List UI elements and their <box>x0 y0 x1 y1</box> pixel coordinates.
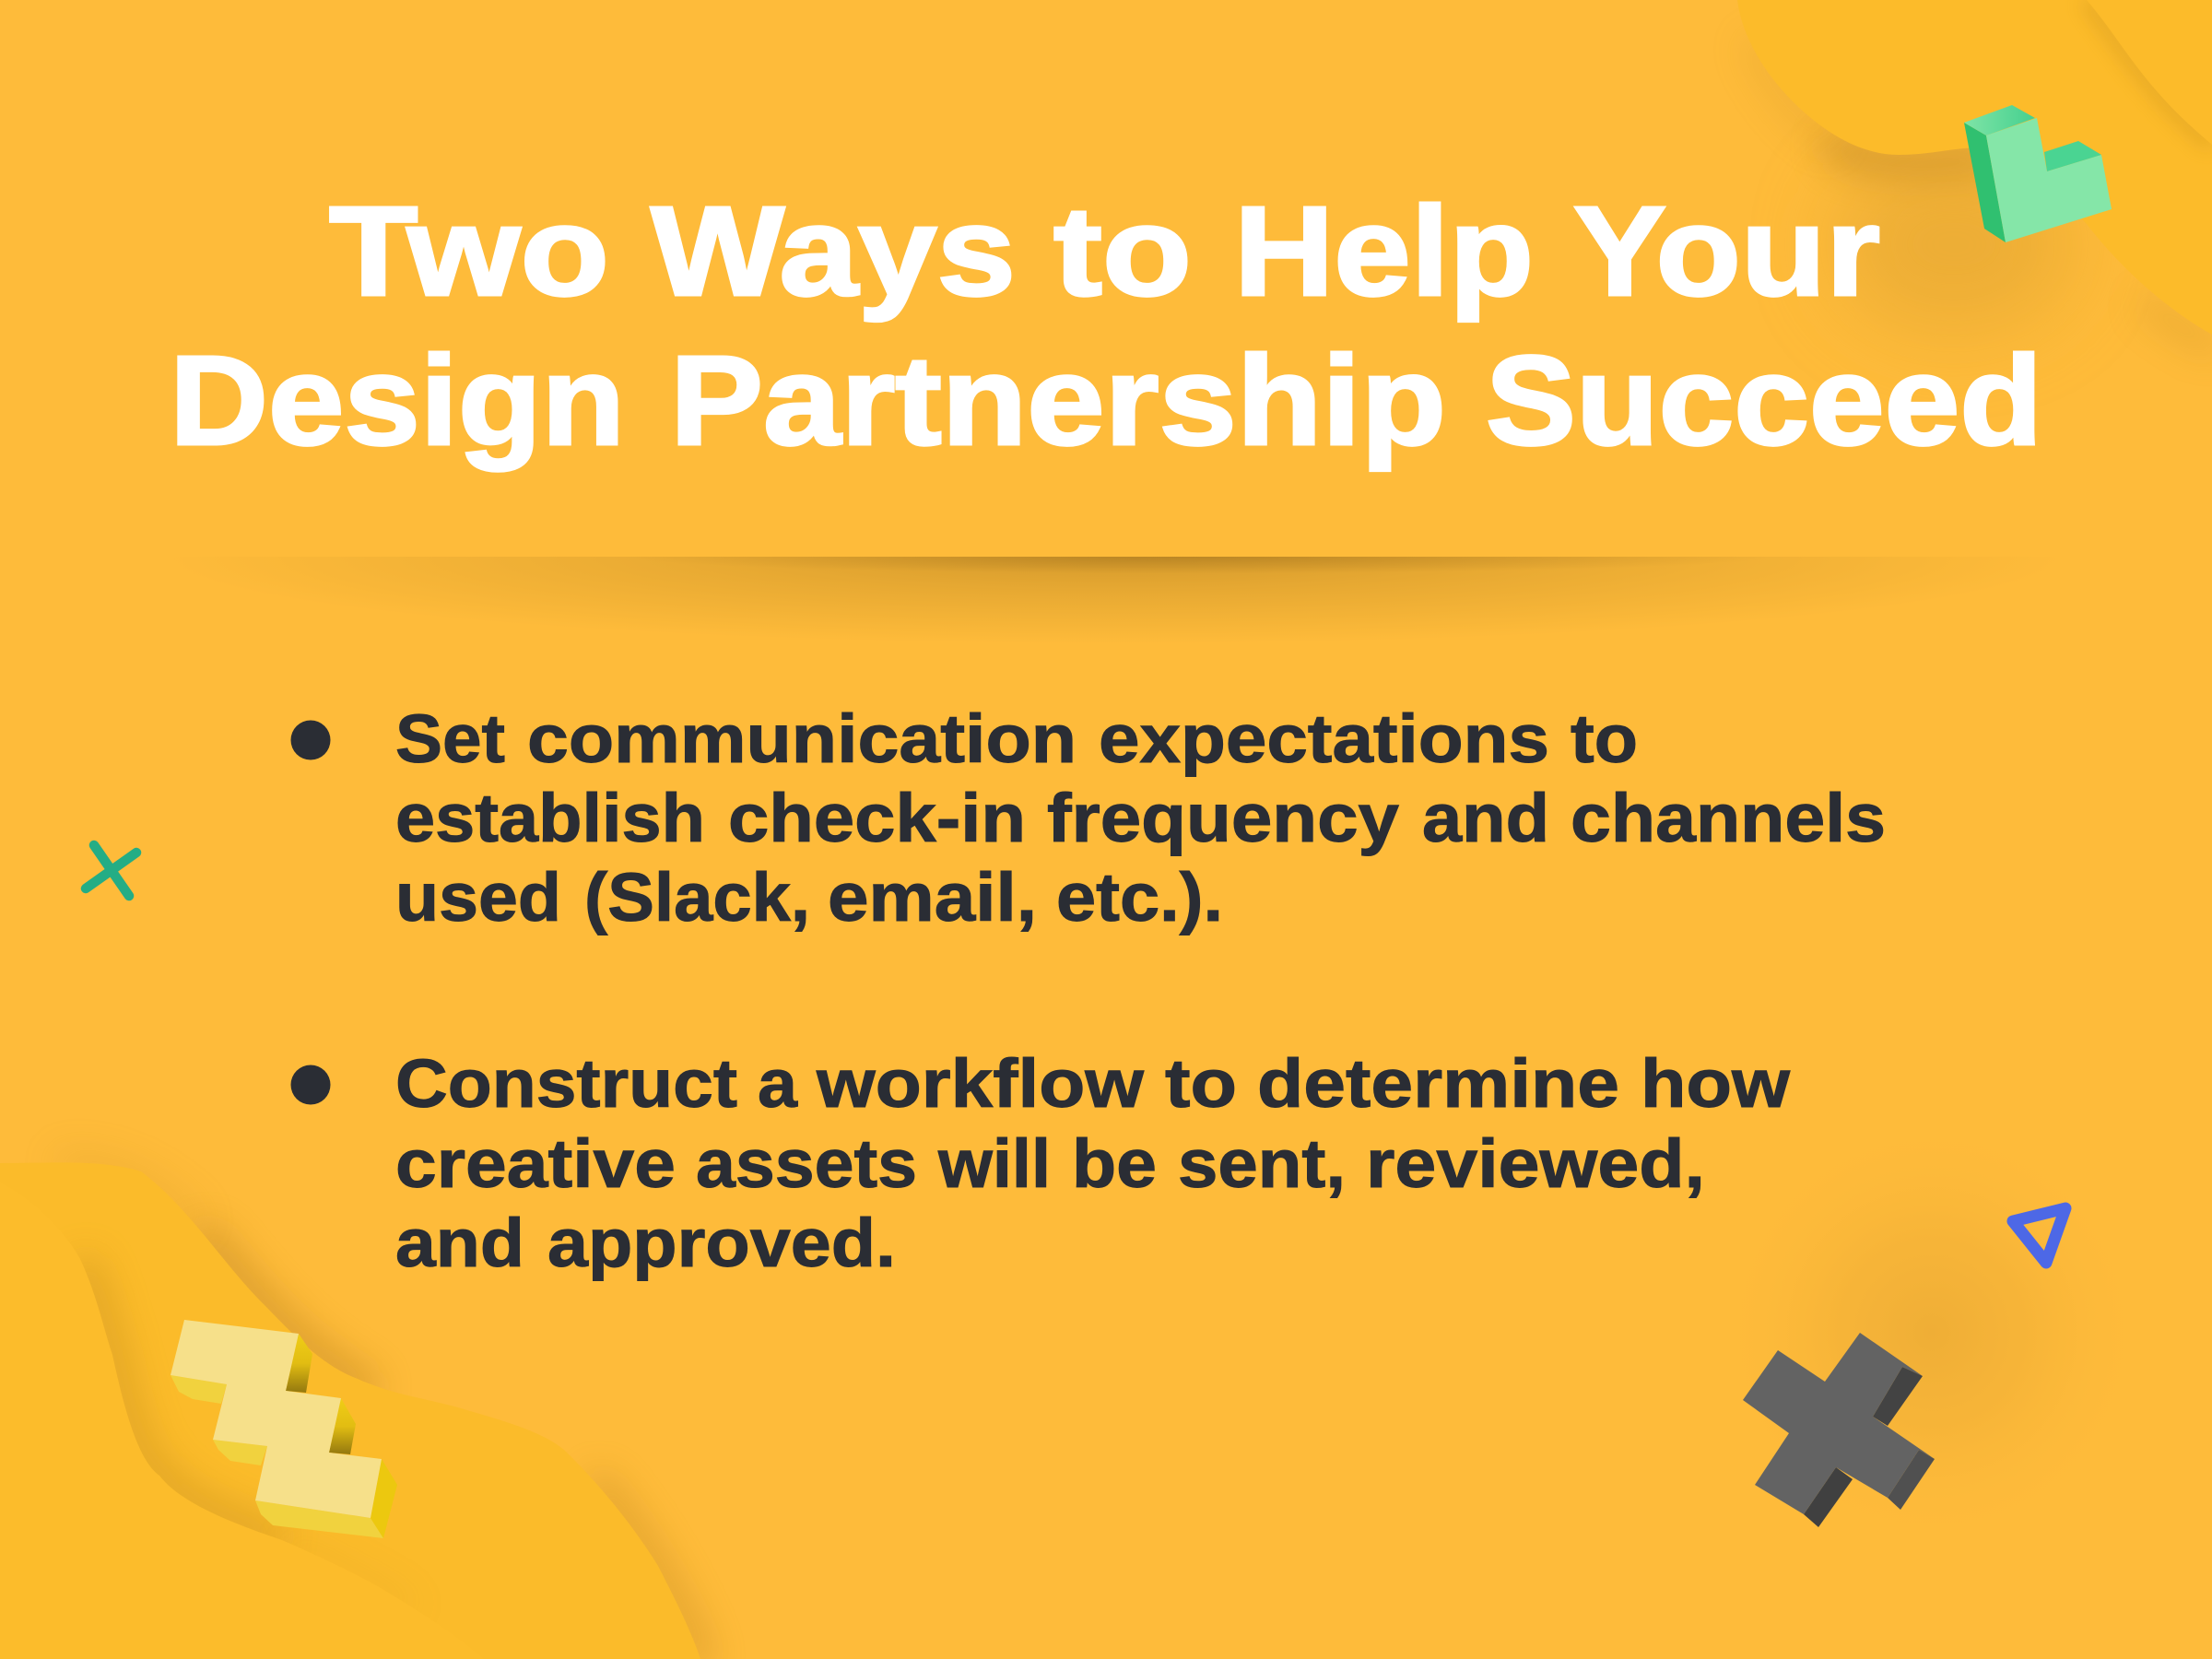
bullet text: email, <box>828 859 1037 935</box>
bullet text: to <box>1571 700 1638 777</box>
bullet text: be <box>1072 1125 1157 1202</box>
title: Design <box>170 330 625 472</box>
title <box>170 181 2042 472</box>
bullet point: communication expectations <box>291 700 1886 935</box>
bottom left wave shapes <box>0 1162 700 1659</box>
bullet text: a <box>758 1045 798 1122</box>
bullet text: Construct <box>395 1045 737 1122</box>
bullet text: expectations <box>1099 700 1549 777</box>
bullet text: workflow <box>816 1045 1144 1122</box>
bullet text: channels <box>1571 780 1886 856</box>
bullet text: how <box>1641 1045 1790 1122</box>
bullet text: approved. <box>547 1205 896 1281</box>
bullet text: and <box>395 1205 524 1281</box>
bullet text: creative <box>395 1125 676 1202</box>
bullet text: frequency <box>1047 780 1399 856</box>
bullet marker <box>291 1065 330 1104</box>
title: Succeed <box>1486 330 2042 472</box>
bullet text: (Slack, <box>584 859 810 935</box>
bullet text: sent, <box>1178 1125 1346 1202</box>
bullet text: communication <box>527 700 1077 777</box>
title: to <box>1053 181 1192 323</box>
icon: dark grey cross <box>1743 1333 1935 1527</box>
title: Two <box>329 181 609 323</box>
title: Ways <box>651 181 1016 323</box>
bullet text <box>395 700 1886 935</box>
soft glow bottom right <box>1715 1116 2148 1549</box>
bullet text: Set <box>395 700 505 777</box>
title: Partnership <box>670 330 1446 472</box>
icon: blue triangle outline <box>2013 1208 2065 1263</box>
bullet text: assets <box>696 1125 917 1202</box>
bullet text: and <box>1422 780 1549 856</box>
bullet text: determine <box>1257 1045 1619 1122</box>
icon: green cross mark <box>86 845 136 896</box>
divider shadow <box>366 557 1865 625</box>
top right wave shapes <box>1737 0 2212 346</box>
title: Help <box>1234 181 1534 323</box>
bullet point: creative workflow <box>291 1045 1790 1281</box>
bullet text: to <box>1165 1045 1237 1122</box>
icon: green L block <box>1964 105 2112 242</box>
bullet text: establish <box>395 780 705 856</box>
title: Your <box>1573 181 1880 323</box>
bullet text: reviewed, <box>1366 1125 1705 1202</box>
bullet text: check-in <box>728 780 1026 856</box>
bullet text <box>395 1045 1790 1281</box>
icon: yellow zigzag block <box>171 1320 397 1538</box>
bullet text: etc.). <box>1056 859 1223 935</box>
bullet text: used <box>395 859 561 935</box>
bullet text: will <box>937 1125 1051 1202</box>
bullet marker <box>291 721 330 759</box>
